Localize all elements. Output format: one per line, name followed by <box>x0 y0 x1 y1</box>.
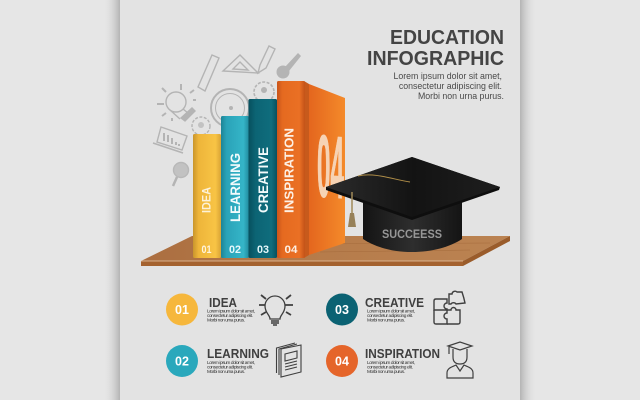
cord <box>358 175 410 182</box>
shelf top <box>141 236 510 261</box>
item 04: inspiration <box>326 342 473 378</box>
icon: magnifier <box>173 162 188 186</box>
icon: puzzle <box>434 291 465 324</box>
book 04: inspiration <box>277 81 345 258</box>
body text: consectetur adipiscing elit. <box>207 364 253 370</box>
graduation cap <box>326 157 500 252</box>
number badge <box>166 294 198 326</box>
icon: people circle small <box>192 117 210 135</box>
right page shadow <box>520 0 537 400</box>
body text: Morbi non urna purus. <box>207 318 245 324</box>
item 01: idea: 01 <box>175 303 189 317</box>
icon: light bulb <box>259 295 293 325</box>
heading: CREATIVE <box>365 296 424 310</box>
item 01: idea <box>166 294 293 326</box>
icon: pencil <box>258 46 275 73</box>
faint education doodle icons <box>153 46 301 186</box>
number badge <box>326 294 358 326</box>
item 02: learning <box>166 343 301 377</box>
subtitle: Lorem ipsum dolor sit amet, <box>393 71 502 81</box>
spine number: 04 <box>284 244 298 256</box>
item 03: creative <box>326 291 465 326</box>
item 03: creative: 03 <box>335 303 349 317</box>
icon: light bulb <box>157 84 196 121</box>
heading: LEARNING <box>207 347 269 361</box>
title: EDUCATION <box>390 26 504 49</box>
body text <box>207 308 255 324</box>
cap board <box>326 157 500 220</box>
body text: Morbi non urna purus. <box>207 369 245 375</box>
icon: set square <box>223 55 258 73</box>
title: INFOGRAPHIC <box>367 47 504 70</box>
book 02: learning <box>221 116 249 258</box>
book 01: idea: IDEA <box>200 187 214 213</box>
icon: laptop chart <box>153 127 187 153</box>
body text: Morbi non urna purus. <box>367 318 405 324</box>
body text: Lorem ipsum dolor sit amet, <box>207 308 255 314</box>
tassel <box>348 192 356 227</box>
book cover <box>309 84 345 255</box>
cap label: SUCCEESS <box>382 227 442 241</box>
book 03: creative <box>248 99 277 258</box>
book 03: creative: 03 <box>257 244 269 256</box>
body text: consectetur adipiscing elit. <box>367 313 413 319</box>
body text <box>207 360 255 375</box>
body text: Lorem ipsum dolor sit amet, <box>207 360 255 366</box>
wooden shelf <box>141 236 510 266</box>
subtitle: consectetur adipiscing elit. <box>399 81 502 91</box>
item 04: inspiration: 04 <box>335 354 349 368</box>
icon: gauge <box>211 89 249 127</box>
infographic canvas: 04 <box>317 116 344 217</box>
book 01: idea: 01 <box>202 244 212 256</box>
item 02: learning: 02 <box>175 354 189 368</box>
body text: consectetur adipiscing elit. <box>367 364 413 370</box>
icon: ruler <box>198 55 219 91</box>
book 02: learning: LEARNING <box>228 153 243 222</box>
body text: Morbi non urna purus. <box>367 369 405 375</box>
body text <box>367 308 415 324</box>
body text: consectetur adipiscing elit. <box>207 313 253 319</box>
body text <box>367 360 415 375</box>
book 02: learning: 02 <box>229 244 241 256</box>
left page shadow <box>103 0 120 400</box>
icon: graduate <box>447 342 473 378</box>
heading: IDEA <box>209 296 237 310</box>
number badge <box>166 345 198 377</box>
shelf front <box>141 261 463 266</box>
heading: INSPIRATION <box>365 347 440 361</box>
subtitle: Morbi non urna purus. <box>418 91 504 101</box>
body text: Lorem ipsum dolor sit amet, <box>367 360 415 366</box>
spine label: INSPIRATION <box>282 128 296 213</box>
number badge <box>326 345 358 377</box>
book 03: creative: CREATIVE <box>256 147 271 213</box>
cap base <box>363 200 462 252</box>
title <box>367 26 504 70</box>
icon: book <box>276 343 301 377</box>
icon: people network <box>254 82 274 102</box>
body text: Lorem ipsum dolor sit amet, <box>367 308 415 314</box>
central page panel <box>120 0 520 400</box>
subtitle <box>393 71 504 101</box>
icon: key <box>276 53 301 78</box>
book 01: idea <box>193 134 221 258</box>
